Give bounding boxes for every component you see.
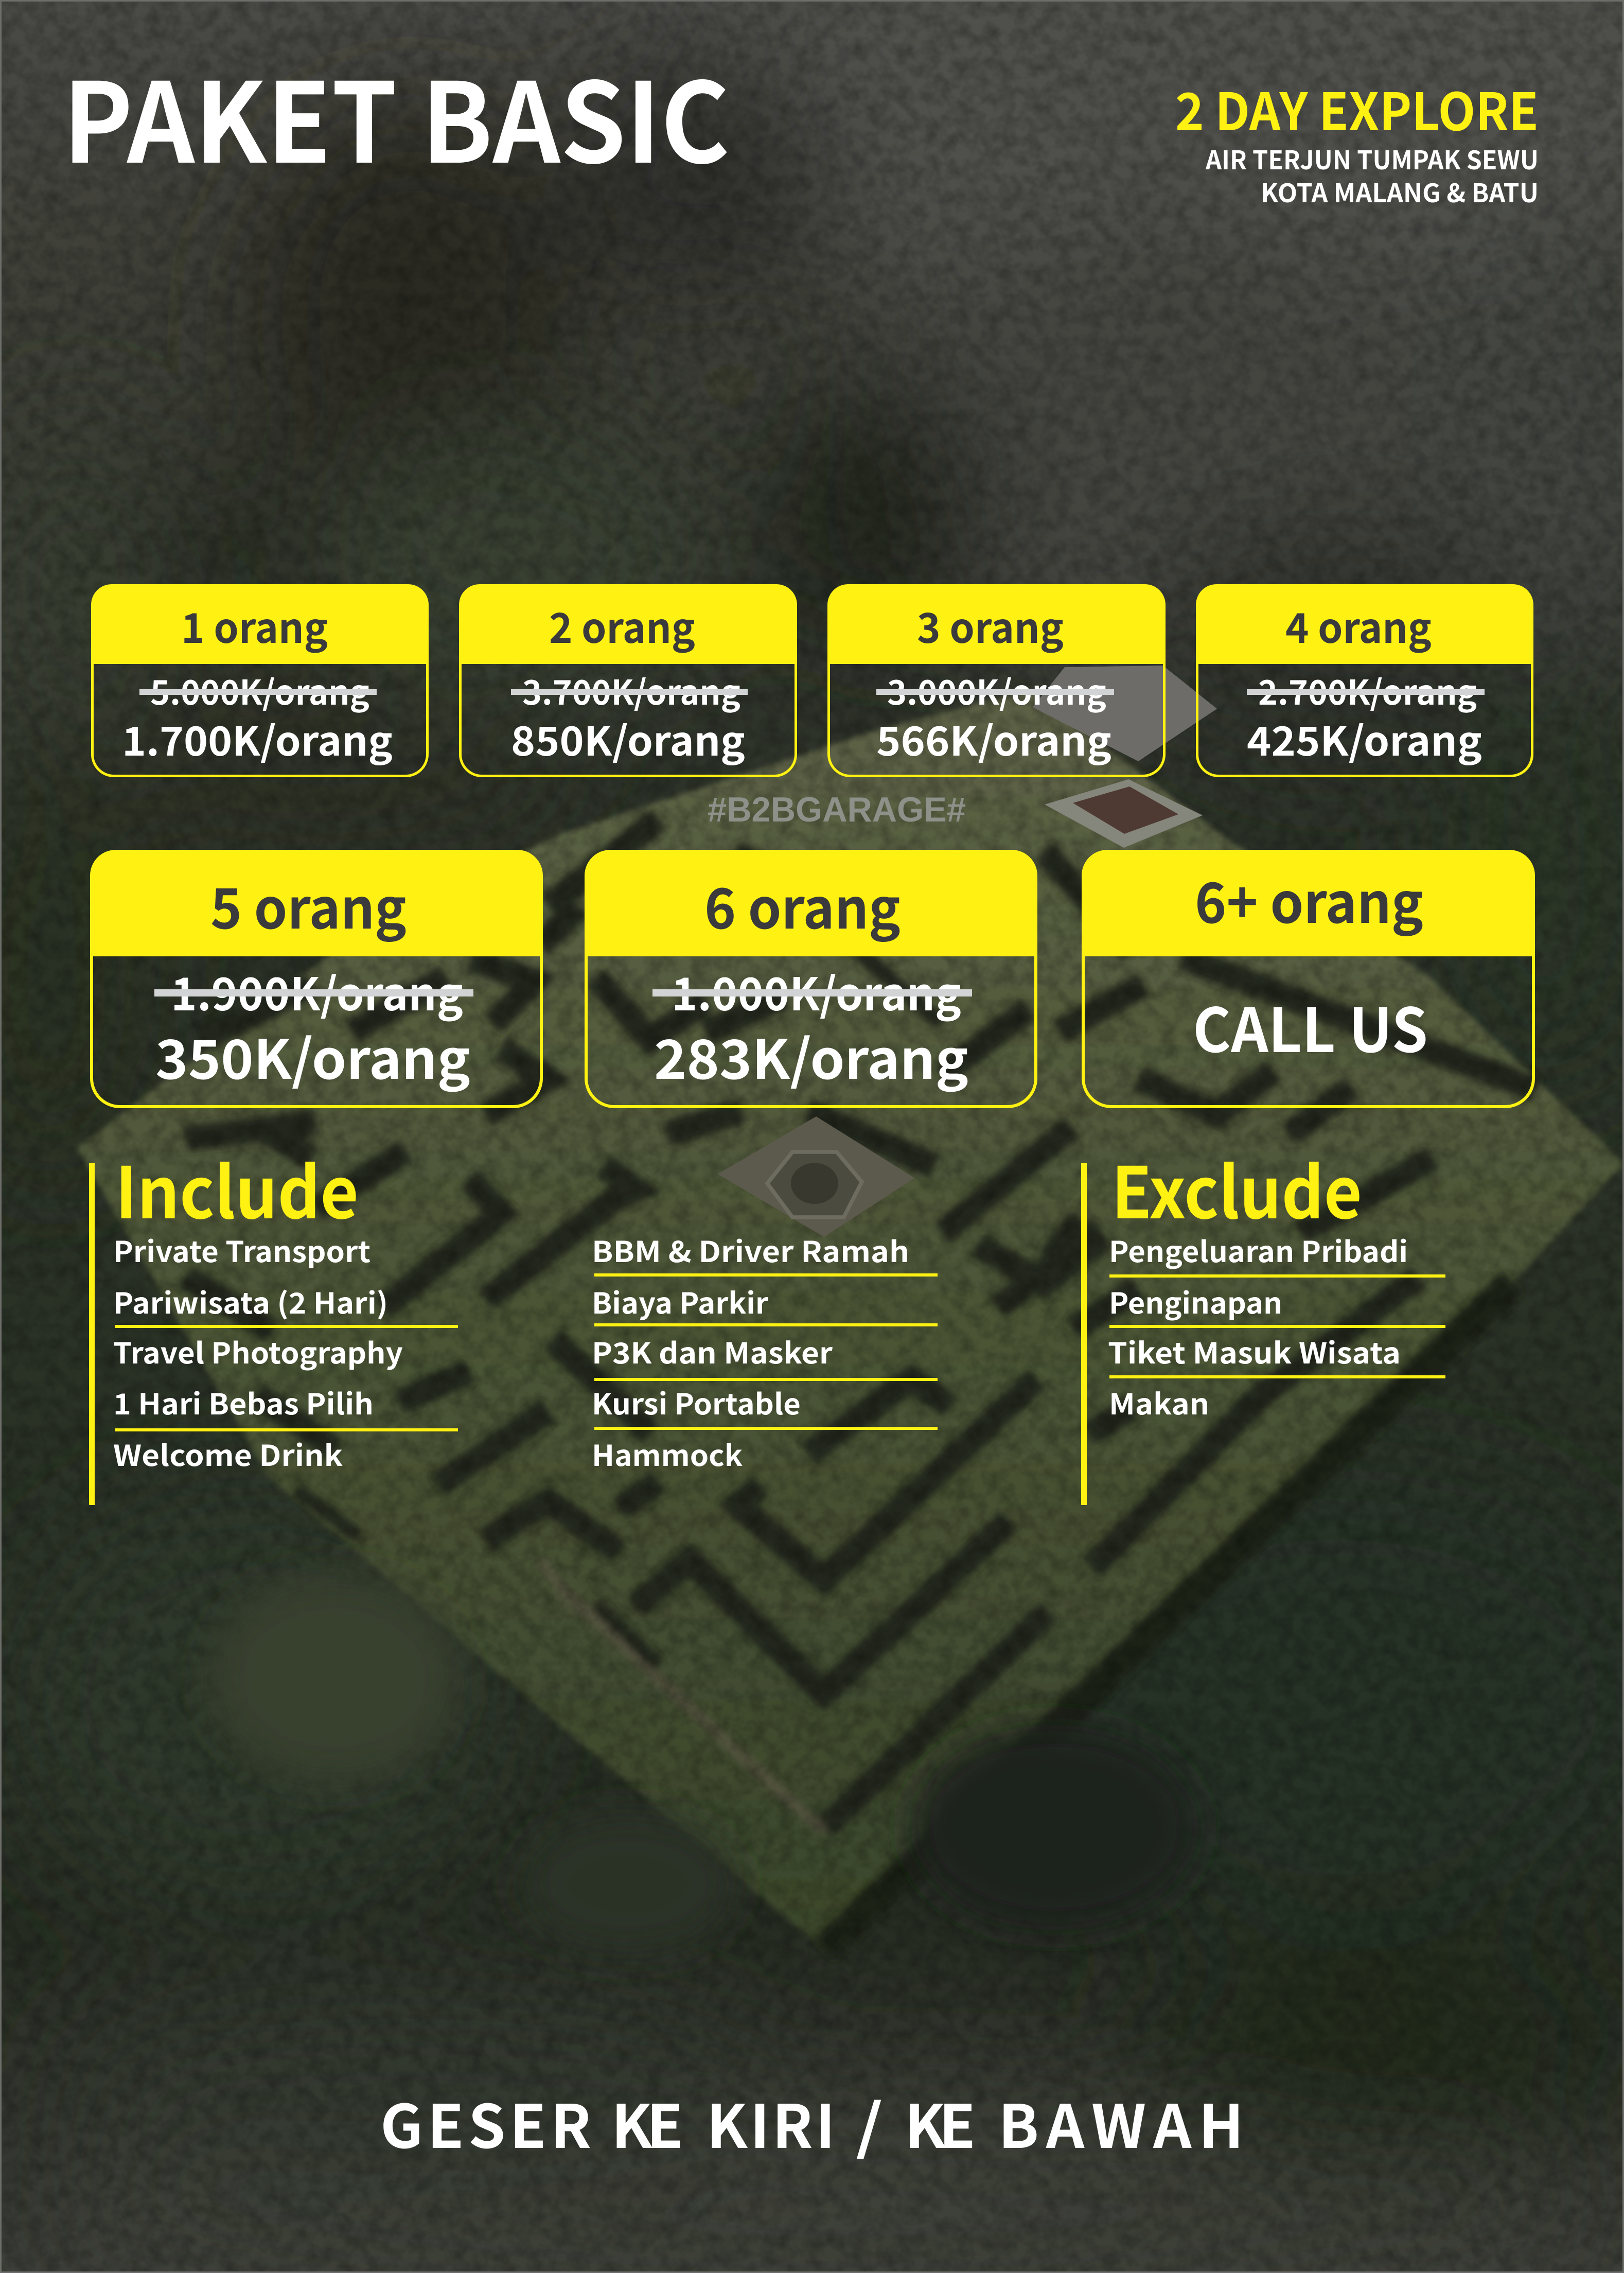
- heading: 2 day explore: 2 DAY EXPLORE: [1175, 71, 1539, 145]
- footer call to action: BAWAH: [998, 2079, 1244, 2165]
- exclude list: Pengeluaran Pribadi: [1109, 1229, 1408, 1271]
- price card: 3 orang: 566K/orang: [876, 710, 1111, 767]
- include list column 1: [113, 1229, 458, 1475]
- include list column 1: Pariwisata (2 Hari): [113, 1281, 388, 1322]
- heading: include: Include: [115, 1136, 359, 1239]
- exclude list: Tiket Masuk Wisata: [1108, 1331, 1401, 1372]
- price card: 6 orang: 283K/orang: [654, 1017, 968, 1095]
- price card: 1 orang: 5.000K/orang: [150, 666, 369, 715]
- include list column 2: BBM & Driver Ramah: [592, 1229, 909, 1271]
- fountain plaza: [718, 1116, 914, 1237]
- price card: 3 orang: 3 orang: [917, 596, 1064, 655]
- price card: 6+ orang: CALL US: [1193, 982, 1428, 1070]
- price card: 1 orang: [91, 584, 429, 776]
- price card: 2 orang: 3.700K/orang: [522, 666, 740, 715]
- exclude list: Penginapan: [1109, 1281, 1282, 1322]
- destination line 1: AIR TERJUN TUMPAK SEWU: [1205, 140, 1539, 177]
- footer call to action: KE: [611, 2079, 683, 2165]
- price card: 4 orang: 2.700K/orang: [1258, 666, 1477, 715]
- price card: 4 orang: [1196, 584, 1533, 776]
- price card: 4 orang: 425K/orang: [1247, 710, 1482, 767]
- price card: 3 orang: 3.000K/orang: [887, 666, 1106, 715]
- price card: 6 orang: 1.000K/orang: [672, 958, 961, 1024]
- subtitle: tour info: [1175, 71, 1539, 210]
- price card: 3 orang: [827, 584, 1166, 776]
- panel: include: [89, 1136, 938, 1505]
- price card: 2 orang: 850K/orang: [511, 710, 745, 767]
- footer call to action: GESER: [380, 2079, 591, 2165]
- include list column 2: P3K dan Masker: [592, 1331, 833, 1372]
- price card: 5 orang: 1.900K/orang: [171, 958, 463, 1024]
- building roof: [1033, 666, 1217, 761]
- price card: 6 orang: [585, 850, 1037, 1107]
- building base: [1045, 779, 1203, 848]
- include list column 1: Private Transport: [113, 1229, 370, 1271]
- price card: 4 orang: 4 orang: [1285, 596, 1432, 655]
- include list column 2: Kursi Portable: [592, 1382, 801, 1423]
- price card: 2 orang: 2 orang: [549, 596, 695, 655]
- price card: 5 orang: 350K/orang: [155, 1017, 470, 1095]
- include list column 2: Biaya Parkir: [592, 1281, 769, 1322]
- footer call to action: KIRI: [707, 2079, 835, 2165]
- include list column 1: 1 Hari Bebas Pilih: [113, 1382, 374, 1423]
- price card: 1 orang: 1 orang: [181, 596, 328, 655]
- watermark: #B2BGARAGE#: [708, 790, 966, 829]
- include list column 1: Welcome Drink: [113, 1433, 343, 1475]
- price card: 5 orang: [90, 850, 543, 1107]
- exclude list: [1108, 1229, 1445, 1423]
- panel: exclude: [1081, 1136, 1445, 1505]
- price card: 2 orang: [459, 584, 797, 776]
- footer call to action: /: [856, 2079, 883, 2165]
- include list column 2: Hammock: [592, 1433, 743, 1475]
- exclude list: Makan: [1109, 1382, 1209, 1423]
- price card: 6+ orang: 6+ orang: [1195, 859, 1423, 939]
- footer call to action: KE: [905, 2079, 976, 2165]
- price card: 6+ orang: [1082, 850, 1535, 1107]
- heading: exclude: Exclude: [1111, 1136, 1362, 1239]
- price card: 6 orang: 6 orang: [704, 865, 901, 945]
- title: PAKET BASIC: [63, 34, 730, 195]
- price card: 5 orang: 5 orang: [210, 865, 407, 945]
- include list column 2: [592, 1229, 938, 1475]
- include list column 1: Travel Photography: [113, 1331, 403, 1372]
- price card: 1 orang: 1.700K/orang: [122, 710, 393, 767]
- destination line 2: KOTA MALANG & BATU: [1261, 173, 1539, 210]
